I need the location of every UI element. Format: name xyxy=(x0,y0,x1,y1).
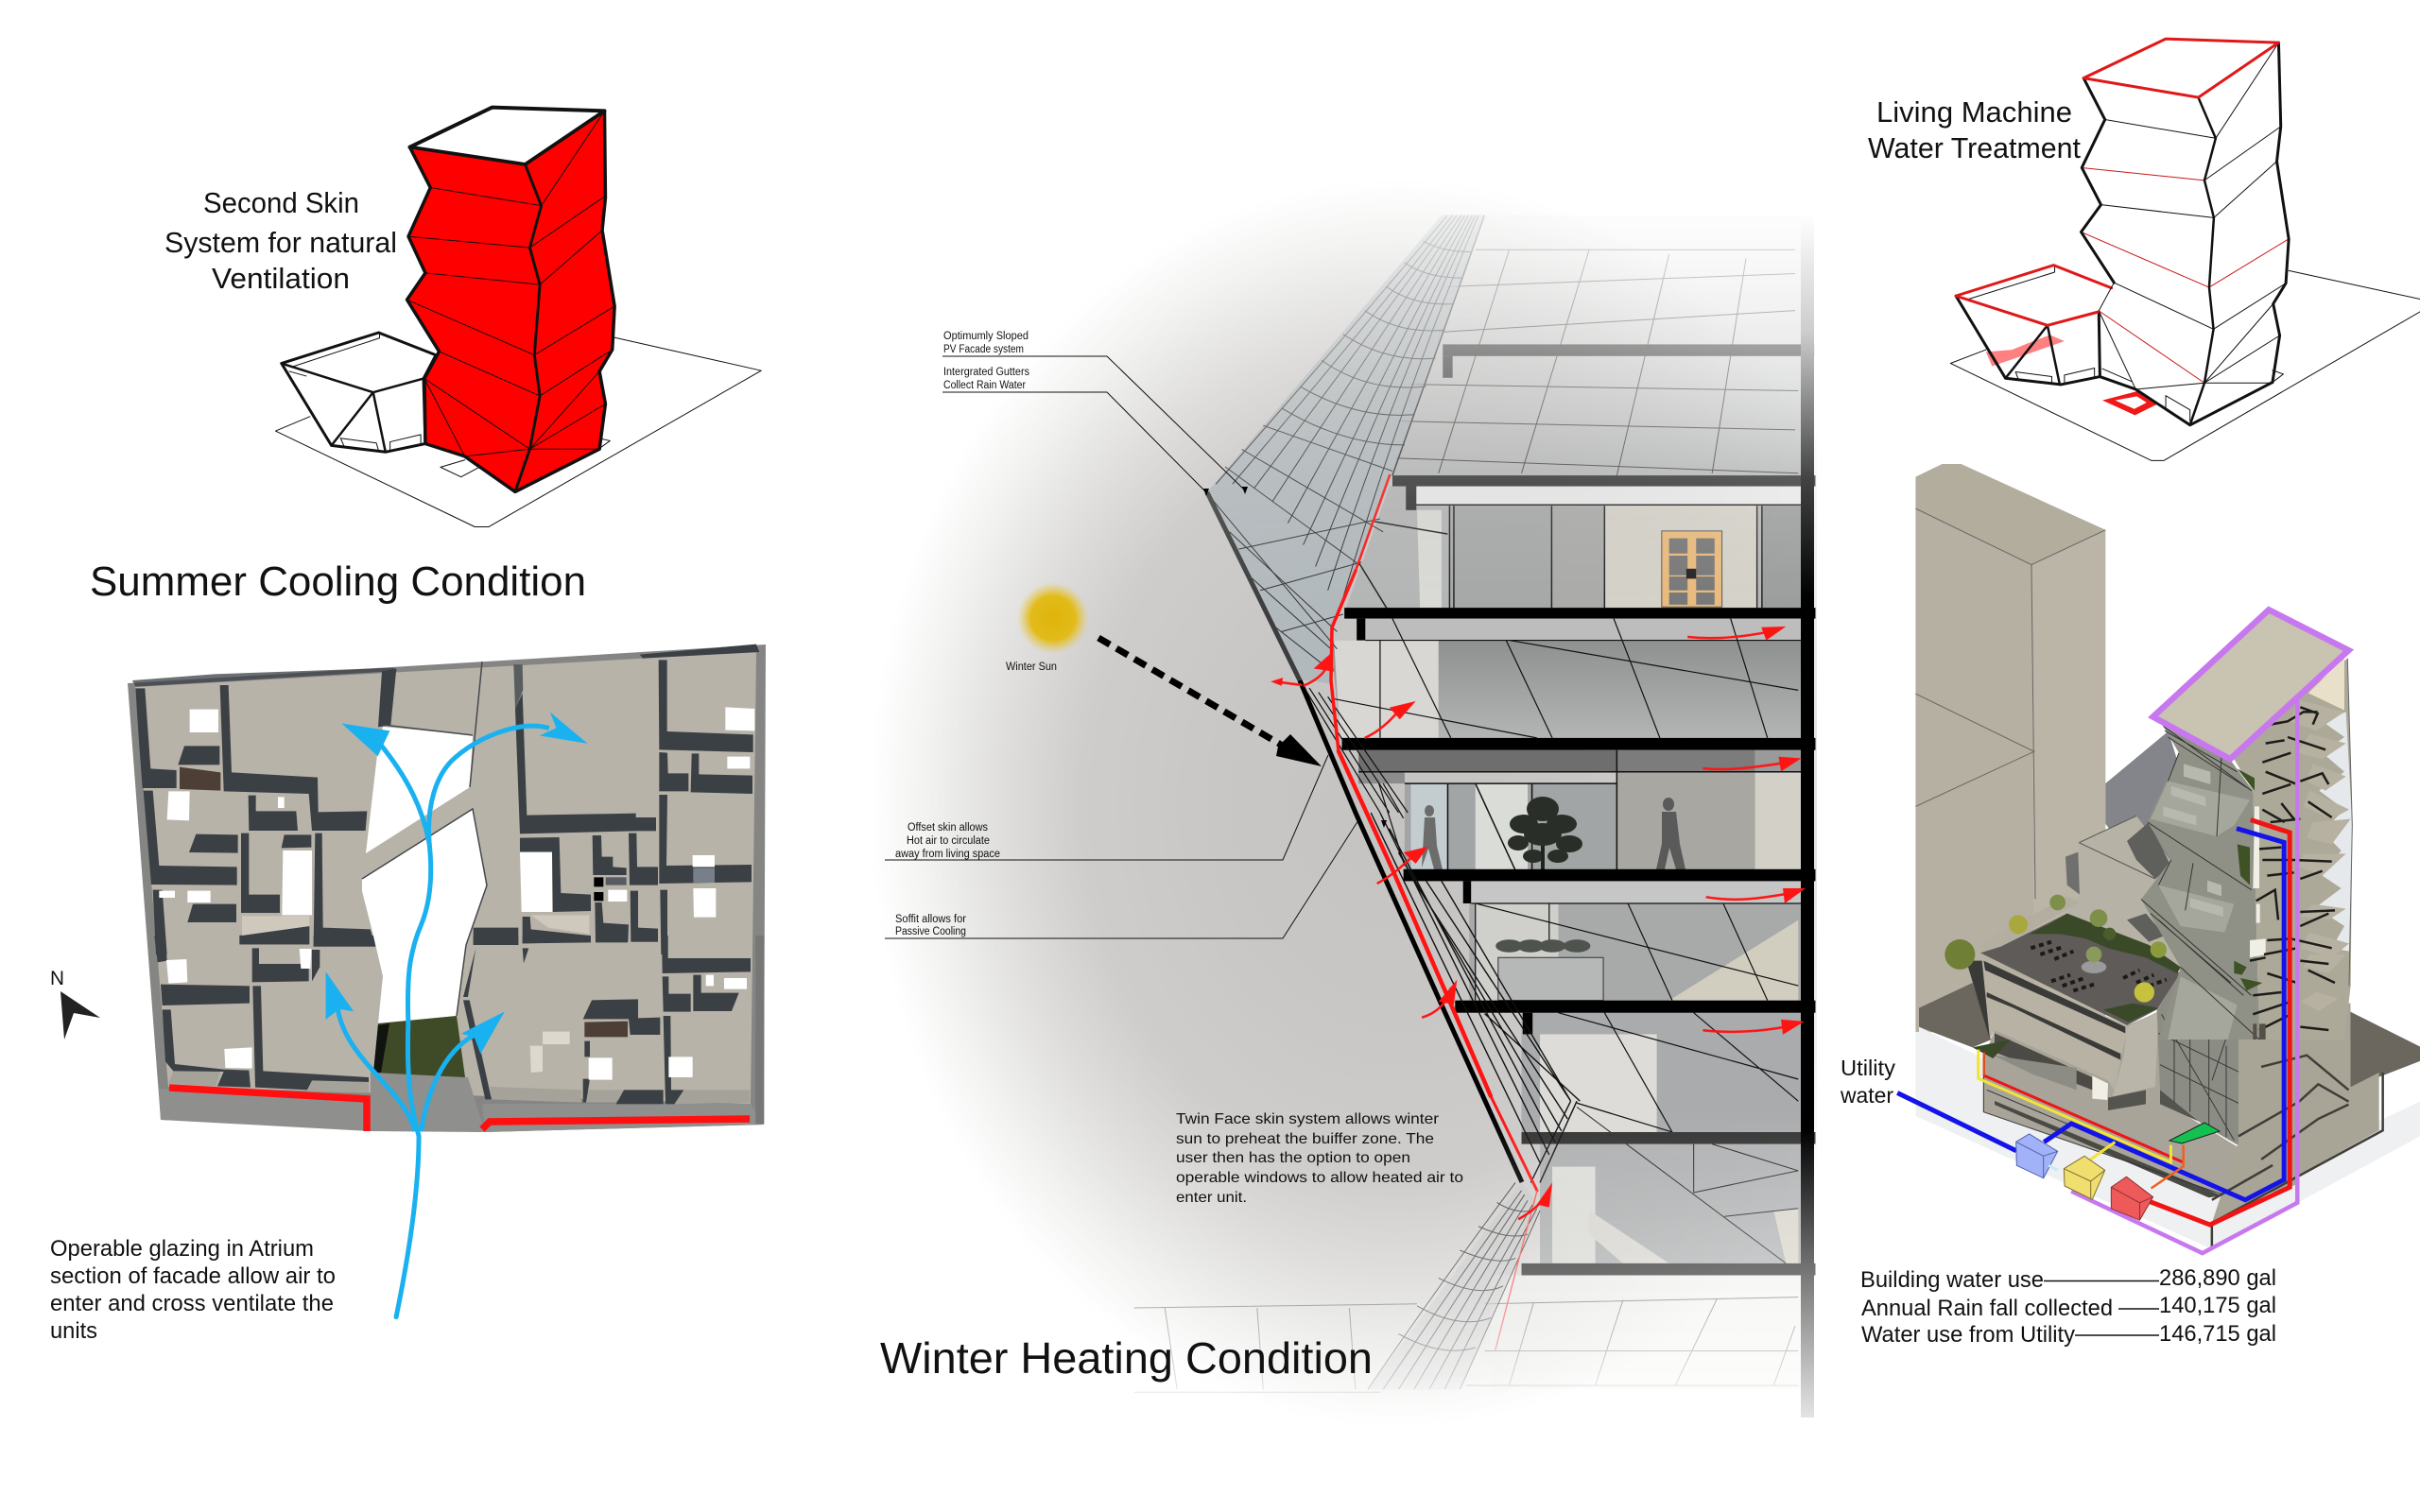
text: twin face note: operable windows to allow heated air to xyxy=(1176,1170,1463,1186)
table: water use figures: 140,175 gal xyxy=(2159,1293,2276,1318)
text: twin face note: user then has the option to open xyxy=(1176,1150,1410,1166)
red air arrows xyxy=(1270,627,1806,1219)
label: second skin: Ventilation xyxy=(212,262,350,295)
courtyard planting xyxy=(373,1016,465,1077)
rear column xyxy=(1801,213,1814,1418)
table: water use figures: Annual Rain fall collected xyxy=(1861,1296,2113,1321)
callouts: section leader notes: Soffit allows for xyxy=(895,914,966,925)
callouts: section leader notes: Hot air to circulate xyxy=(907,835,990,847)
outer skin line xyxy=(1207,492,1300,680)
plan lower right rooms xyxy=(463,936,764,1124)
lower glazed tower xyxy=(2157,973,2253,1146)
lower mesh xyxy=(1368,813,1580,1389)
table: water use figures xyxy=(1860,1265,2276,1348)
hatch of inner skin xyxy=(1371,813,1580,1182)
lower tower and ramps xyxy=(2212,991,2383,1249)
plan upper right rooms xyxy=(474,644,759,954)
podium and terrace xyxy=(1919,816,2297,1202)
diagram: isometric water system xyxy=(1897,464,2420,1253)
label: second skin: System for natural xyxy=(164,226,397,259)
red glazing line xyxy=(169,1088,750,1131)
storage tanks xyxy=(2016,1134,2105,1199)
icon: north arrow: N xyxy=(50,968,64,989)
tower core and balconies xyxy=(2141,659,2352,1040)
background: grey gradient behind section xyxy=(851,170,1817,1436)
plan lower left rooms xyxy=(154,936,375,1093)
heading: winter heating condition: Winter Heating Condition xyxy=(880,1333,1373,1383)
podium faces xyxy=(1982,961,2127,1090)
plan: atrium floor plan xyxy=(128,644,766,1317)
neighbouring tall building xyxy=(1915,464,2105,1032)
red heated air path xyxy=(1331,475,1537,1349)
text: twin face note xyxy=(1176,1111,1463,1206)
text: operable glazing note: section of facade allow air to xyxy=(50,1263,336,1289)
table: water use figures: Water use from Utility xyxy=(1861,1322,2075,1348)
table: water use figures: Building water use xyxy=(1860,1267,2044,1293)
label: utility water xyxy=(1840,1056,1896,1108)
label: utility water: water xyxy=(1840,1083,1893,1108)
label: second skin: Second Skin xyxy=(203,186,359,219)
icon: winter sun xyxy=(1017,582,1089,654)
callouts: section leader notes: Intergrated Gutters xyxy=(943,367,1029,378)
rooftop collector xyxy=(2153,610,2348,759)
table: water use figures: 146,715 gal xyxy=(2159,1321,2276,1347)
text: twin face note: sun to preheat the buiffer zone. The xyxy=(1176,1131,1434,1147)
section: twin face facade building section xyxy=(1134,215,1815,1392)
heading: summer cooling condition: Summer Cooling Condition xyxy=(90,558,586,605)
text: operable glazing note: enter and cross ventilate the xyxy=(50,1291,334,1316)
label: living machine xyxy=(1868,95,2081,164)
diagram: summer massing model with red second skin xyxy=(275,108,761,527)
upper photovoltaic mesh xyxy=(1206,215,1484,683)
label: utility water: Utility xyxy=(1841,1056,1896,1080)
callouts: section leader notes: PV Facade system xyxy=(943,344,1024,355)
text: twin face note: enter unit. xyxy=(1176,1190,1247,1206)
atrium voids xyxy=(362,727,487,1023)
callouts: section leader notes: Collect Rain Water xyxy=(943,380,1026,391)
cafe tables xyxy=(2031,942,2167,990)
label: second skin xyxy=(164,186,397,295)
roof terrace xyxy=(1980,896,2080,953)
text: operable glazing note xyxy=(50,1236,336,1344)
water pipes xyxy=(1897,696,2297,1253)
text: twin face note: Twin Face skin system allows winter xyxy=(1176,1111,1440,1127)
callouts: section leader notes xyxy=(885,331,1387,938)
callouts: section leader notes: Passive Cooling xyxy=(895,926,966,937)
green cistern cover xyxy=(2169,1123,2220,1143)
callouts: section leader notes: Optimumly Sloped xyxy=(943,331,1028,342)
callouts: section leader notes: Winter Sun xyxy=(1006,662,1057,673)
diagram: living machine massing model xyxy=(1950,39,2420,460)
label: living machine: Water Treatment xyxy=(1868,131,2081,164)
door xyxy=(1662,531,1722,607)
arrow: winter sun ray xyxy=(1098,638,1322,766)
text: operable glazing note: Operable glazing in Atrium xyxy=(50,1236,314,1262)
label: living machine: Living Machine xyxy=(1876,95,2072,129)
text: operable glazing note: units xyxy=(50,1318,97,1344)
blue airflow arrows xyxy=(326,713,588,1317)
basement xyxy=(1983,1008,2297,1202)
plan upper left rooms xyxy=(132,668,397,954)
tree and people xyxy=(1422,797,1685,870)
callouts: section leader notes: Offset skin allows xyxy=(908,822,988,833)
planter xyxy=(1495,939,1603,1001)
icon: north arrow xyxy=(50,968,100,1040)
table: water use figures: 286,890 gal xyxy=(2159,1265,2276,1291)
callouts: section leader notes: away from living space xyxy=(895,849,1000,860)
